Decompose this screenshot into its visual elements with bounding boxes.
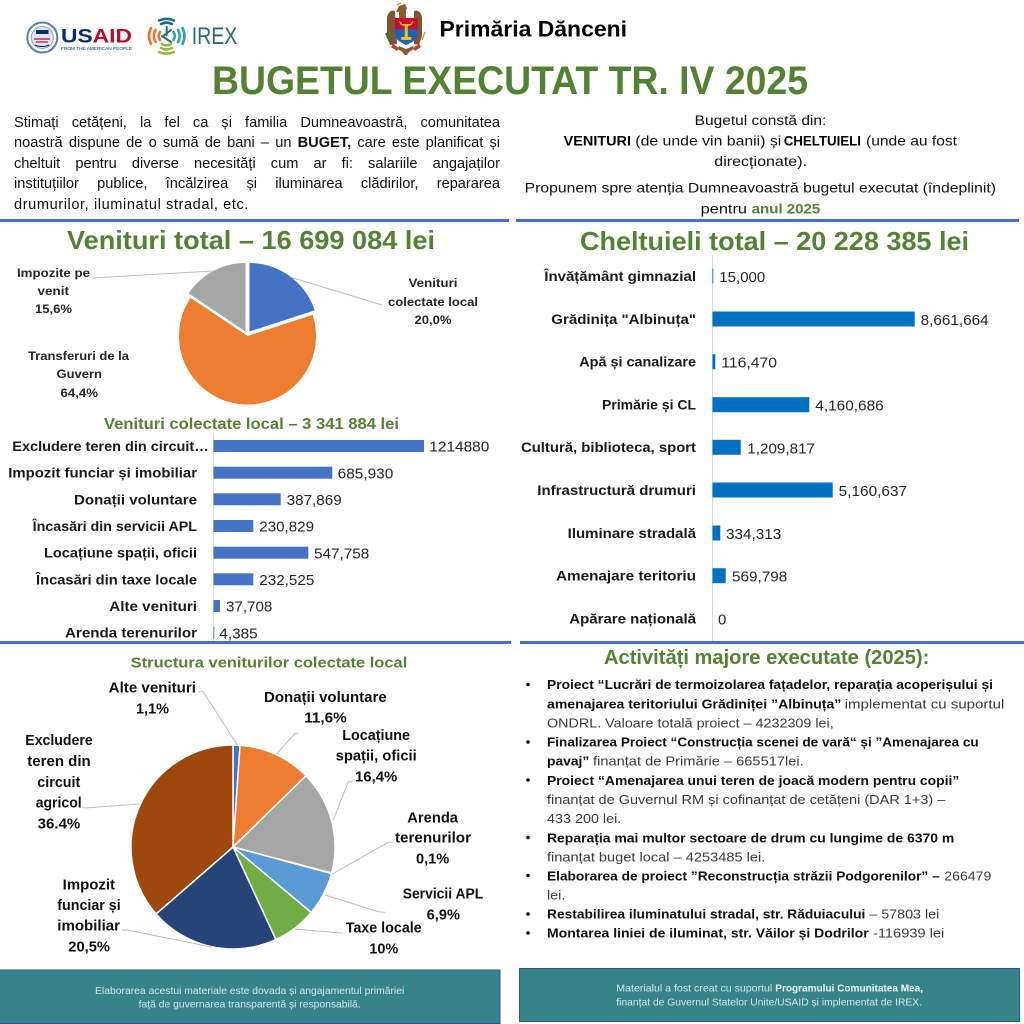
activity: thermal insulation project: ONDRL. Valoare totală proiect – 4232309 lei, bbox=[547, 715, 834, 730]
icon: coat of arms of Moldova bbox=[386, 3, 425, 55]
label: Excludere teren din circuit agricol bbox=[25, 733, 93, 832]
category labels: Impozit funciar și imobiliar bbox=[8, 466, 198, 481]
label: Arenda terenurilor: 0,1% bbox=[416, 851, 449, 867]
slice: Excludere teren din circuit agricol bbox=[131, 745, 233, 914]
label: Locațiune spații, oficii: Locațiune bbox=[342, 728, 410, 744]
pie chart: structure of locally collected revenue bbox=[25, 681, 483, 957]
category labels: Iluminare stradală bbox=[568, 526, 697, 541]
heading: Activități majore executate: Activități majore executate (2025): bbox=[604, 647, 929, 669]
label: Venituri colectate local: 20,0% bbox=[414, 313, 452, 327]
pie chart: total revenue bbox=[17, 263, 478, 404]
value labels: 1,209,817 bbox=[747, 441, 815, 457]
activity: playground bbox=[547, 773, 959, 826]
activity: thermal insulation project: implementat cu suportul bbox=[845, 696, 1004, 711]
footer: support note: Materialul a fost creat cu suportul bbox=[616, 984, 772, 995]
label: Alte venituri: 1,1% bbox=[136, 701, 169, 717]
text block: budget explanation: VENITURI bbox=[564, 134, 631, 150]
slice: Transferuri de la Guvern bbox=[179, 298, 316, 404]
activity: Podgorenilor street project: Elaborarea de proiect ”Reconstrucția străzii Podgorenilor” – bbox=[547, 868, 940, 883]
text block: budget explanation: (de unde vin banii) și bbox=[635, 134, 781, 150]
value labels: 230,829 bbox=[259, 520, 314, 536]
category labels: Excludere teren din circuit… bbox=[12, 439, 209, 454]
label: Alte venituri: Alte venituri bbox=[109, 681, 196, 697]
heading: Primăria Dănceni: Primăria Dănceni bbox=[440, 16, 627, 42]
logo: IREX bbox=[149, 19, 237, 54]
activity: thermal insulation project: Proiect “Lucrări de termoizolarea fațadelor, reparația acoperișului și bbox=[547, 677, 993, 692]
label: Venituri colectate local: Venituri bbox=[408, 276, 458, 290]
label: Excludere teren din circuit agricol: Excludere bbox=[25, 733, 93, 749]
label: Excludere teren din circuit agricol: 36.4% bbox=[38, 816, 80, 832]
bar chart: locally collected revenue bbox=[8, 433, 489, 642]
label: Donații voluntare: 11,6% bbox=[304, 711, 347, 727]
value labels: 15,000 bbox=[719, 270, 765, 286]
label: Transferuri de la Guvern: Guvern bbox=[56, 367, 102, 381]
label: Venituri colectate local bbox=[388, 276, 478, 327]
category labels: Încasări din servicii APL bbox=[32, 519, 197, 534]
label: Arenda terenurilor: Arenda bbox=[407, 810, 459, 826]
label: Impozit funciar și imobiliar: imobiliar bbox=[57, 919, 120, 935]
activity: summer stage and paving bbox=[547, 735, 979, 769]
text block: introduction: cheltuit pentru diverse necesități cum ar fi: salariile angajaților bbox=[14, 156, 500, 172]
value labels: 5,160,637 bbox=[839, 484, 907, 500]
label: Impozite pe venit: venit bbox=[38, 284, 69, 298]
value labels: 1214880 bbox=[429, 440, 489, 456]
slice: Servicii APL bbox=[233, 847, 331, 912]
label: Servicii APL bbox=[403, 887, 483, 923]
heading: Cheltuieli total: Cheltuieli total – 20 228 385 lei bbox=[580, 226, 969, 256]
label: Taxe locale: Taxe locale bbox=[346, 921, 422, 937]
activity: playground: 433 200 lei. bbox=[547, 811, 621, 826]
label: Locațiune spații, oficii bbox=[336, 728, 417, 786]
category labels: Grădinița "Albinuța" bbox=[551, 312, 696, 327]
text block: major activities list bbox=[526, 677, 1004, 941]
label: Donații voluntare bbox=[264, 690, 387, 727]
slice: Venituri colectate local bbox=[250, 263, 315, 332]
heading: Venituri total: Venituri total – 16 699 084 lei bbox=[67, 225, 435, 255]
category labels: Primărie și CL bbox=[602, 398, 696, 412]
label: Servicii APL: Servicii APL bbox=[403, 887, 483, 903]
activity: road repairs: finanțat buget local – 4253485 lei. bbox=[547, 849, 765, 864]
category labels: Învățământ gimnazial bbox=[543, 269, 696, 284]
slice: Impozite pe venit bbox=[189, 263, 246, 332]
text block: introduction: instituțiilor publice, încălzirea și iluminarea clădirilor, repararea bbox=[14, 176, 500, 192]
footer: support note: Programului Comunitatea Mea, bbox=[775, 984, 923, 995]
label: Impozit funciar și imobiliar: 20,5% bbox=[68, 940, 110, 956]
logo: USAID: USAID bbox=[61, 25, 132, 47]
activity: road repairs bbox=[547, 830, 954, 864]
label: Impozit funciar și imobiliar: Impozit bbox=[63, 877, 115, 893]
activity: Podgorenilor street project: 266479 bbox=[944, 868, 991, 883]
footer: transparency note: Elaborarea acestui materiale este dovada și angajamentul primăriei bbox=[95, 986, 404, 997]
footer: support note: finanțat de Guvernul Statelor Unite/USAID și implementat de IREX. bbox=[616, 998, 922, 1009]
footer: support note bbox=[520, 968, 1020, 1022]
label: Locațiune spații, oficii: 16,4% bbox=[355, 770, 397, 786]
text block: introduction: noastră dispune de o sumă de bani – un BUGET, care este planificat și bbox=[14, 135, 500, 151]
category labels: Infrastructură drumuri bbox=[537, 483, 696, 498]
label: Transferuri de la Guvern: 64,4% bbox=[60, 386, 98, 400]
label: Impozite pe venit bbox=[17, 266, 90, 316]
label: Taxe locale: 10% bbox=[369, 941, 398, 957]
label: Venituri colectate local: colectate local bbox=[388, 295, 478, 309]
activity: Podgorenilor street project: lei. bbox=[547, 887, 565, 902]
value labels: 116,470 bbox=[721, 356, 777, 372]
value labels bbox=[718, 270, 989, 629]
text block: budget explanation bbox=[525, 113, 996, 217]
label: Impozite pe venit: Impozite pe bbox=[17, 266, 90, 280]
value labels: 547,758 bbox=[314, 546, 369, 562]
slice: Donații voluntare bbox=[233, 745, 306, 847]
activity: street lighting restoration: Restabilirea iluminatului stradal, str. Răduiacului bbox=[547, 907, 865, 922]
activity: thermal insulation project bbox=[547, 677, 1004, 730]
value labels: 4,385 bbox=[219, 626, 258, 642]
label: Arenda terenurilor: terenurilor bbox=[395, 831, 471, 847]
label: Excludere teren din circuit agricol: circuit bbox=[37, 775, 80, 791]
text block: budget explanation: Propunem spre atenția Dumneavoastră bugetul executat (îndeplinit) bbox=[525, 181, 996, 197]
footer: transparency note bbox=[0, 970, 500, 1024]
label: Transferuri de la Guvern bbox=[28, 349, 129, 400]
slice: Locațiune spații, oficii bbox=[233, 776, 335, 873]
activity: playground: finanțat de Guvernul RM și cofinanțat de cetățeni (DAR 1+3) – bbox=[547, 792, 946, 807]
text block: budget explanation: direcționate). bbox=[714, 154, 807, 170]
label: Alte venituri bbox=[109, 681, 196, 717]
text block: introduction: Stimați cetățeni, la fel ca și familia Dumneavoastră, comunitatea bbox=[14, 115, 500, 131]
category labels: Alte venituri bbox=[109, 599, 197, 614]
value labels: 8,661,664 bbox=[921, 313, 989, 329]
text block: budget explanation: CHELTUIELI bbox=[784, 134, 861, 150]
value labels: 4,160,686 bbox=[815, 399, 884, 415]
slice: Alte venituri bbox=[233, 745, 240, 847]
footer: transparency note: față de guvernarea transparentă și responsabilă. bbox=[139, 1000, 361, 1011]
value labels: 334,313 bbox=[726, 527, 781, 543]
label: Servicii APL: 6,9% bbox=[427, 907, 460, 923]
category labels bbox=[521, 269, 697, 626]
category labels: Încasări din taxe locale bbox=[35, 572, 198, 587]
category labels: Cultură, biblioteca, sport bbox=[521, 440, 697, 455]
label: Arenda terenurilor bbox=[395, 810, 471, 867]
label: Excludere teren din circuit agricol: teren din bbox=[27, 754, 91, 770]
activity: street lighting restoration: – 57803 lei bbox=[869, 907, 939, 922]
category labels bbox=[8, 439, 209, 641]
text block: introduction bbox=[14, 115, 500, 213]
category labels: Apă și canalizare bbox=[579, 354, 697, 370]
label: Taxe locale bbox=[346, 921, 422, 957]
activity: playground: Proiect “Amenajarea unui teren de joacă modern pentru copii” bbox=[547, 773, 959, 788]
logo: IREX: IREX bbox=[192, 23, 237, 50]
activity: summer stage and paving: finanțat de Primărie – 665517lei. bbox=[593, 754, 804, 769]
activity: thermal insulation project: amenajarea teritoriului Grădiniței ”Albinuța” bbox=[547, 696, 841, 711]
slice: Taxe locale bbox=[233, 847, 311, 940]
category labels: Arenda terenurilor bbox=[65, 626, 198, 641]
title: BUGETUL EXECUTAT TR. IV 2025 bbox=[212, 59, 808, 103]
text block: introduction: drumurilor, iluminatul stradal, etc. bbox=[14, 197, 249, 213]
value labels: 0 bbox=[718, 613, 726, 629]
value labels: 387,869 bbox=[287, 493, 342, 509]
category labels: Apărare națională bbox=[569, 612, 697, 626]
text block: budget explanation: pentru bbox=[701, 201, 747, 217]
category labels: Donații voluntare bbox=[74, 492, 198, 507]
label: Excludere teren din circuit agricol: agricol bbox=[36, 796, 82, 812]
heading: Venituri colectate local: Venituri colectate local – 3 341 884 lei bbox=[104, 416, 399, 433]
heading: Structura veniturilor colectate local: Structura veniturilor colectate local bbox=[131, 655, 407, 671]
value labels: 685,930 bbox=[338, 466, 393, 482]
label: Transferuri de la Guvern: Transferuri de la bbox=[28, 349, 129, 363]
category labels: Amenajare teritoriu bbox=[556, 568, 696, 584]
value labels: 37,708 bbox=[226, 600, 272, 616]
activity: lighting line installation: -116939 lei bbox=[873, 926, 944, 941]
activity: Podgorenilor street project bbox=[547, 868, 991, 902]
text block: budget explanation: anul 2025 bbox=[752, 201, 820, 217]
activity: summer stage and paving: pavaj” bbox=[547, 754, 589, 769]
label: Locațiune spații, oficii: spații, oficii bbox=[336, 749, 417, 765]
logo: USAID: FROM THE AMERICAN PEOPLE bbox=[61, 46, 132, 51]
label: Donații voluntare: Donații voluntare bbox=[264, 690, 387, 706]
label: Impozit funciar și imobiliar: funciar și bbox=[57, 898, 121, 914]
category labels: Locațiune spații, oficii bbox=[44, 546, 197, 561]
label: Impozit funciar și imobiliar bbox=[57, 877, 121, 956]
bar chart: expenses bbox=[521, 255, 989, 642]
value labels bbox=[219, 440, 489, 642]
activity: road repairs: Reparația mai multor sectoare de drum cu lungime de 6370 m bbox=[547, 830, 954, 845]
label: Impozite pe venit: 15,6% bbox=[35, 302, 72, 316]
slice: Impozit funciar și imobiliar bbox=[156, 847, 276, 949]
logo: USAID bbox=[27, 22, 132, 52]
value labels: 569,798 bbox=[732, 570, 787, 586]
activity: lighting line installation: Montarea liniei de iluminat, str. Văilor și Dodrilor bbox=[547, 926, 869, 941]
text block: budget explanation: Bugetul constă din: bbox=[695, 113, 826, 129]
activity: summer stage and paving: Finalizarea Proiect “Construcția scenei de vară“ și ”Amenajarea cu bbox=[547, 735, 979, 750]
value labels: 232,525 bbox=[259, 573, 314, 589]
text block: budget explanation: (unde au fost bbox=[866, 134, 957, 150]
